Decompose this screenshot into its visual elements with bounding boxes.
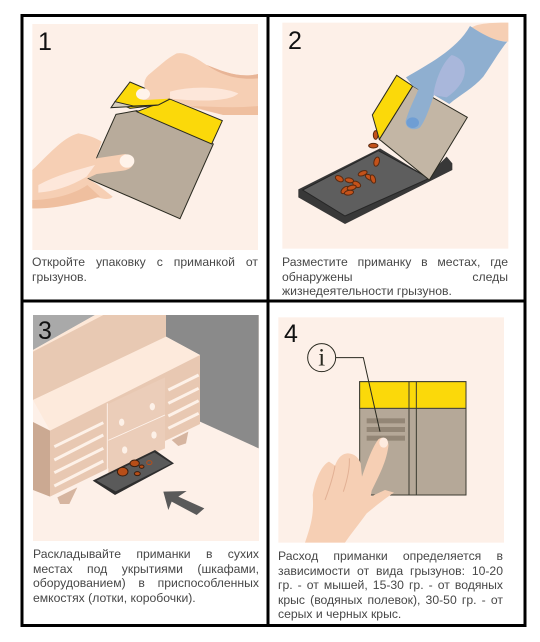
caption 3: местах под укрытиями (шкафами, (33, 562, 259, 576)
icon: pointing hand (305, 438, 394, 543)
caption 4 (278, 549, 503, 621)
icon: cabinet (33, 315, 200, 504)
icon: room walls (33, 315, 259, 448)
icon: package body (87, 82, 222, 219)
icon: info symbol with pointer: i (318, 345, 325, 372)
icon: package pouring (372, 75, 467, 180)
caption 2: Разместите приманку в местах, где (282, 255, 508, 269)
caption 3: Раскладывайте приманки в сухих (33, 547, 259, 561)
caption 3: оборудованием) в приспособленных (33, 576, 259, 590)
caption 4: серых и черных крыс. (278, 607, 401, 621)
icon: lower hand (32, 133, 134, 208)
icon: tray (298, 148, 452, 224)
icon: bait seeds (334, 131, 380, 196)
caption 4: крыс (водяных полевок), 30-50 гр. - от (278, 593, 503, 607)
number 2: 2 (288, 27, 302, 55)
number 1: 1 (38, 28, 52, 56)
icon: gloved hand (406, 23, 508, 129)
panel 1 illustration: opening the package (32, 24, 258, 250)
icon: tray under cabinet (93, 450, 174, 495)
icon: upper hand (136, 53, 258, 115)
caption 2: жизнедеятельности грызунов. (282, 284, 452, 298)
caption 4: зависимости от вида грызунов: 10-20 (278, 564, 503, 578)
number 3: 3 (38, 317, 52, 345)
caption 2 (282, 255, 508, 298)
caption 2: обнаружены следы (282, 270, 508, 284)
icon: package front (360, 382, 466, 495)
arrow (163, 491, 204, 515)
panel 2 illustration: pouring bait on tray (282, 23, 508, 249)
caption 1: грызунов. (32, 270, 87, 284)
caption 4: гр. - от мышей, 15-30 гр. - от водяных (278, 578, 503, 592)
number 4: 4 (284, 320, 298, 348)
caption 4: Расход приманки определяется в (278, 549, 503, 563)
panel 3 illustration: cabinet with tray (33, 315, 259, 541)
caption 3: емкостях (лотки, коробочки). (33, 591, 196, 605)
icon: info symbol with pointer (308, 344, 380, 432)
caption 3 (33, 547, 259, 605)
caption 1 (32, 255, 258, 284)
panel 4 illustration: reading the package (278, 317, 504, 543)
caption 1: Откройте упаковку с приманкой от (32, 255, 258, 269)
